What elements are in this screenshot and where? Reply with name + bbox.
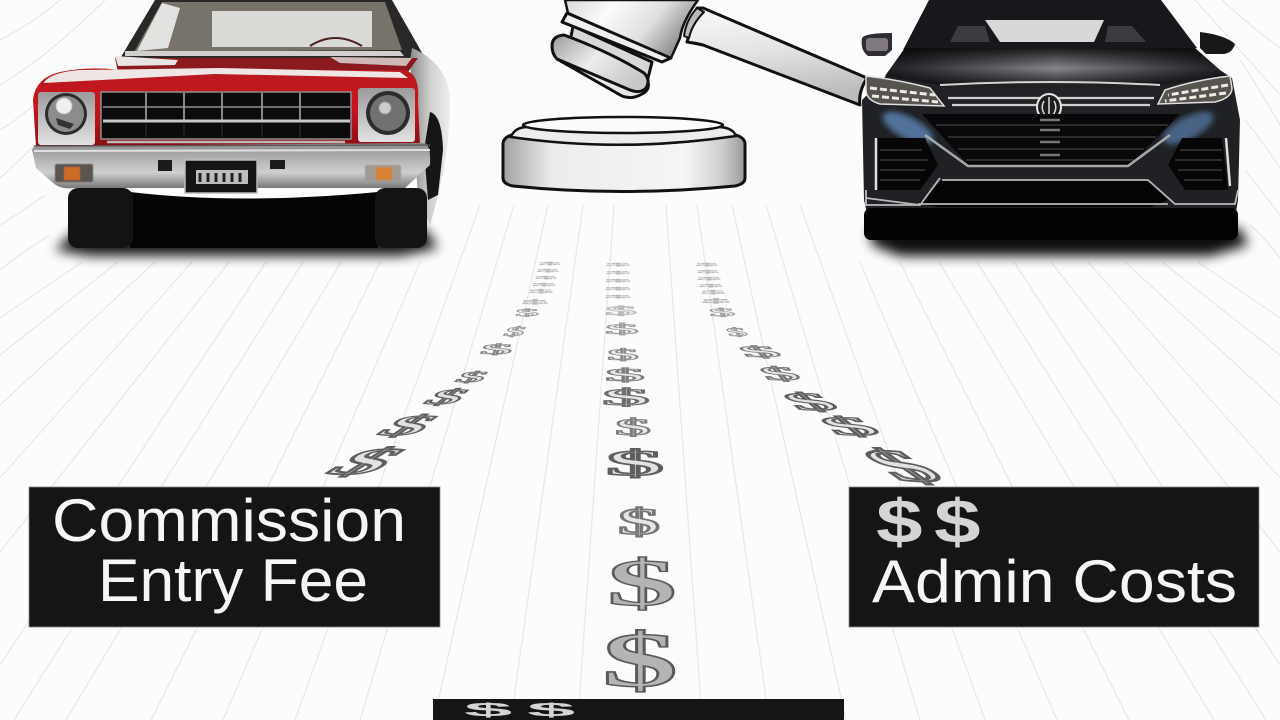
right dollar trail: $ <box>696 262 718 267</box>
body <box>862 48 1240 236</box>
upper chrome grille <box>942 88 1162 112</box>
centre dollar trail: $ <box>607 346 639 364</box>
headlight left <box>38 92 95 145</box>
blue glows <box>878 105 938 151</box>
gavel flange <box>562 13 671 62</box>
right dollar trail: $ <box>841 441 963 491</box>
hood <box>885 48 1226 85</box>
right body side <box>410 48 450 225</box>
car shadow <box>55 228 438 256</box>
right dollar trail: $ <box>697 277 721 281</box>
mirrors <box>862 32 1235 56</box>
headlight right <box>358 88 415 142</box>
left dollar trail: $ <box>478 342 516 357</box>
centre dollar trail: $ <box>602 385 650 410</box>
left dollar trail: $ <box>522 298 548 306</box>
centre dollar trail: $ <box>605 321 639 337</box>
lower bumper <box>918 180 1168 207</box>
right dollar trail: $ <box>771 388 849 415</box>
left dollar trail: $ <box>365 409 453 441</box>
centre dollar trail: $ <box>605 304 637 318</box>
right dollar trail: $ <box>723 326 751 339</box>
right dollar trail: $ <box>753 363 807 384</box>
label: admin costs <box>849 487 1259 627</box>
label: bottom cropped panel <box>433 699 844 720</box>
centre dollar trail: $ <box>615 414 651 440</box>
right dollar trail: $ <box>699 284 723 288</box>
left dollar trail: $ <box>309 441 425 482</box>
label: bottom cropped panel: $$ <box>464 699 575 720</box>
left dollar trail: $ <box>529 289 553 294</box>
chrome bumper <box>32 143 430 188</box>
gavel sound block <box>503 117 745 192</box>
windshield <box>903 0 1197 50</box>
fog lights <box>55 164 401 182</box>
left dollar trail: $ <box>515 307 540 318</box>
right dollar trail: $ <box>697 269 719 274</box>
centre dollar trail: $ <box>605 278 631 283</box>
cabin <box>118 0 425 62</box>
licence plate <box>158 160 285 193</box>
centre dollar trail: $ <box>606 443 664 483</box>
label: commission entry fee: Commission <box>52 487 406 554</box>
centre dollar trail: $ <box>605 365 645 385</box>
main grille <box>922 114 1180 167</box>
gavel cap <box>552 35 648 98</box>
label: admin costs: $$ <box>876 487 981 556</box>
gavel neck <box>570 26 652 78</box>
centre dollar trail: $ <box>605 294 631 299</box>
centre dollar trail: $ <box>602 617 678 703</box>
side intakes <box>876 138 1230 190</box>
label: commission entry fee: Entry Fee <box>98 547 368 614</box>
dark modern car <box>862 0 1248 256</box>
gavel collar <box>684 8 704 38</box>
right dollar trail: $ <box>732 343 788 361</box>
left dollar trail: $ <box>500 324 530 339</box>
headlights <box>866 76 1232 106</box>
left dollar trail: $ <box>535 275 557 280</box>
right dollar trail: $ <box>808 411 891 441</box>
label: commission entry fee <box>29 487 440 627</box>
gavel head <box>565 0 698 58</box>
gavel handle <box>687 8 867 105</box>
left dollar trail: $ <box>415 385 480 409</box>
gavel <box>552 0 867 105</box>
centre dollar trail <box>602 263 678 703</box>
grille <box>101 92 351 139</box>
left dollar trail: $ <box>532 283 556 287</box>
hood <box>33 68 420 146</box>
right dollar trail: $ <box>702 297 730 304</box>
right dollar trail: $ <box>701 290 725 295</box>
chrome bar <box>940 82 1160 85</box>
left dollar trail <box>309 261 561 482</box>
centre dollar trail: $ <box>618 502 660 543</box>
centre dollar trail: $ <box>606 263 630 267</box>
label: admin costs: Admin Costs <box>872 548 1237 615</box>
left dollar trail: $ <box>537 268 559 273</box>
centre dollar trail: $ <box>605 286 631 291</box>
lower body <box>864 208 1238 240</box>
left dollar trail: $ <box>449 369 494 386</box>
red classic car <box>32 0 450 256</box>
right dollar trail <box>696 262 963 491</box>
cowl <box>115 58 418 72</box>
logo <box>1037 94 1061 120</box>
underbody and tyres <box>68 188 427 248</box>
right dollar trail: $ <box>707 306 737 319</box>
left dollar trail: $ <box>539 261 561 266</box>
centre dollar trail: $ <box>606 271 630 275</box>
car shadow <box>870 228 1248 256</box>
centre dollar trail: $ <box>607 546 677 620</box>
